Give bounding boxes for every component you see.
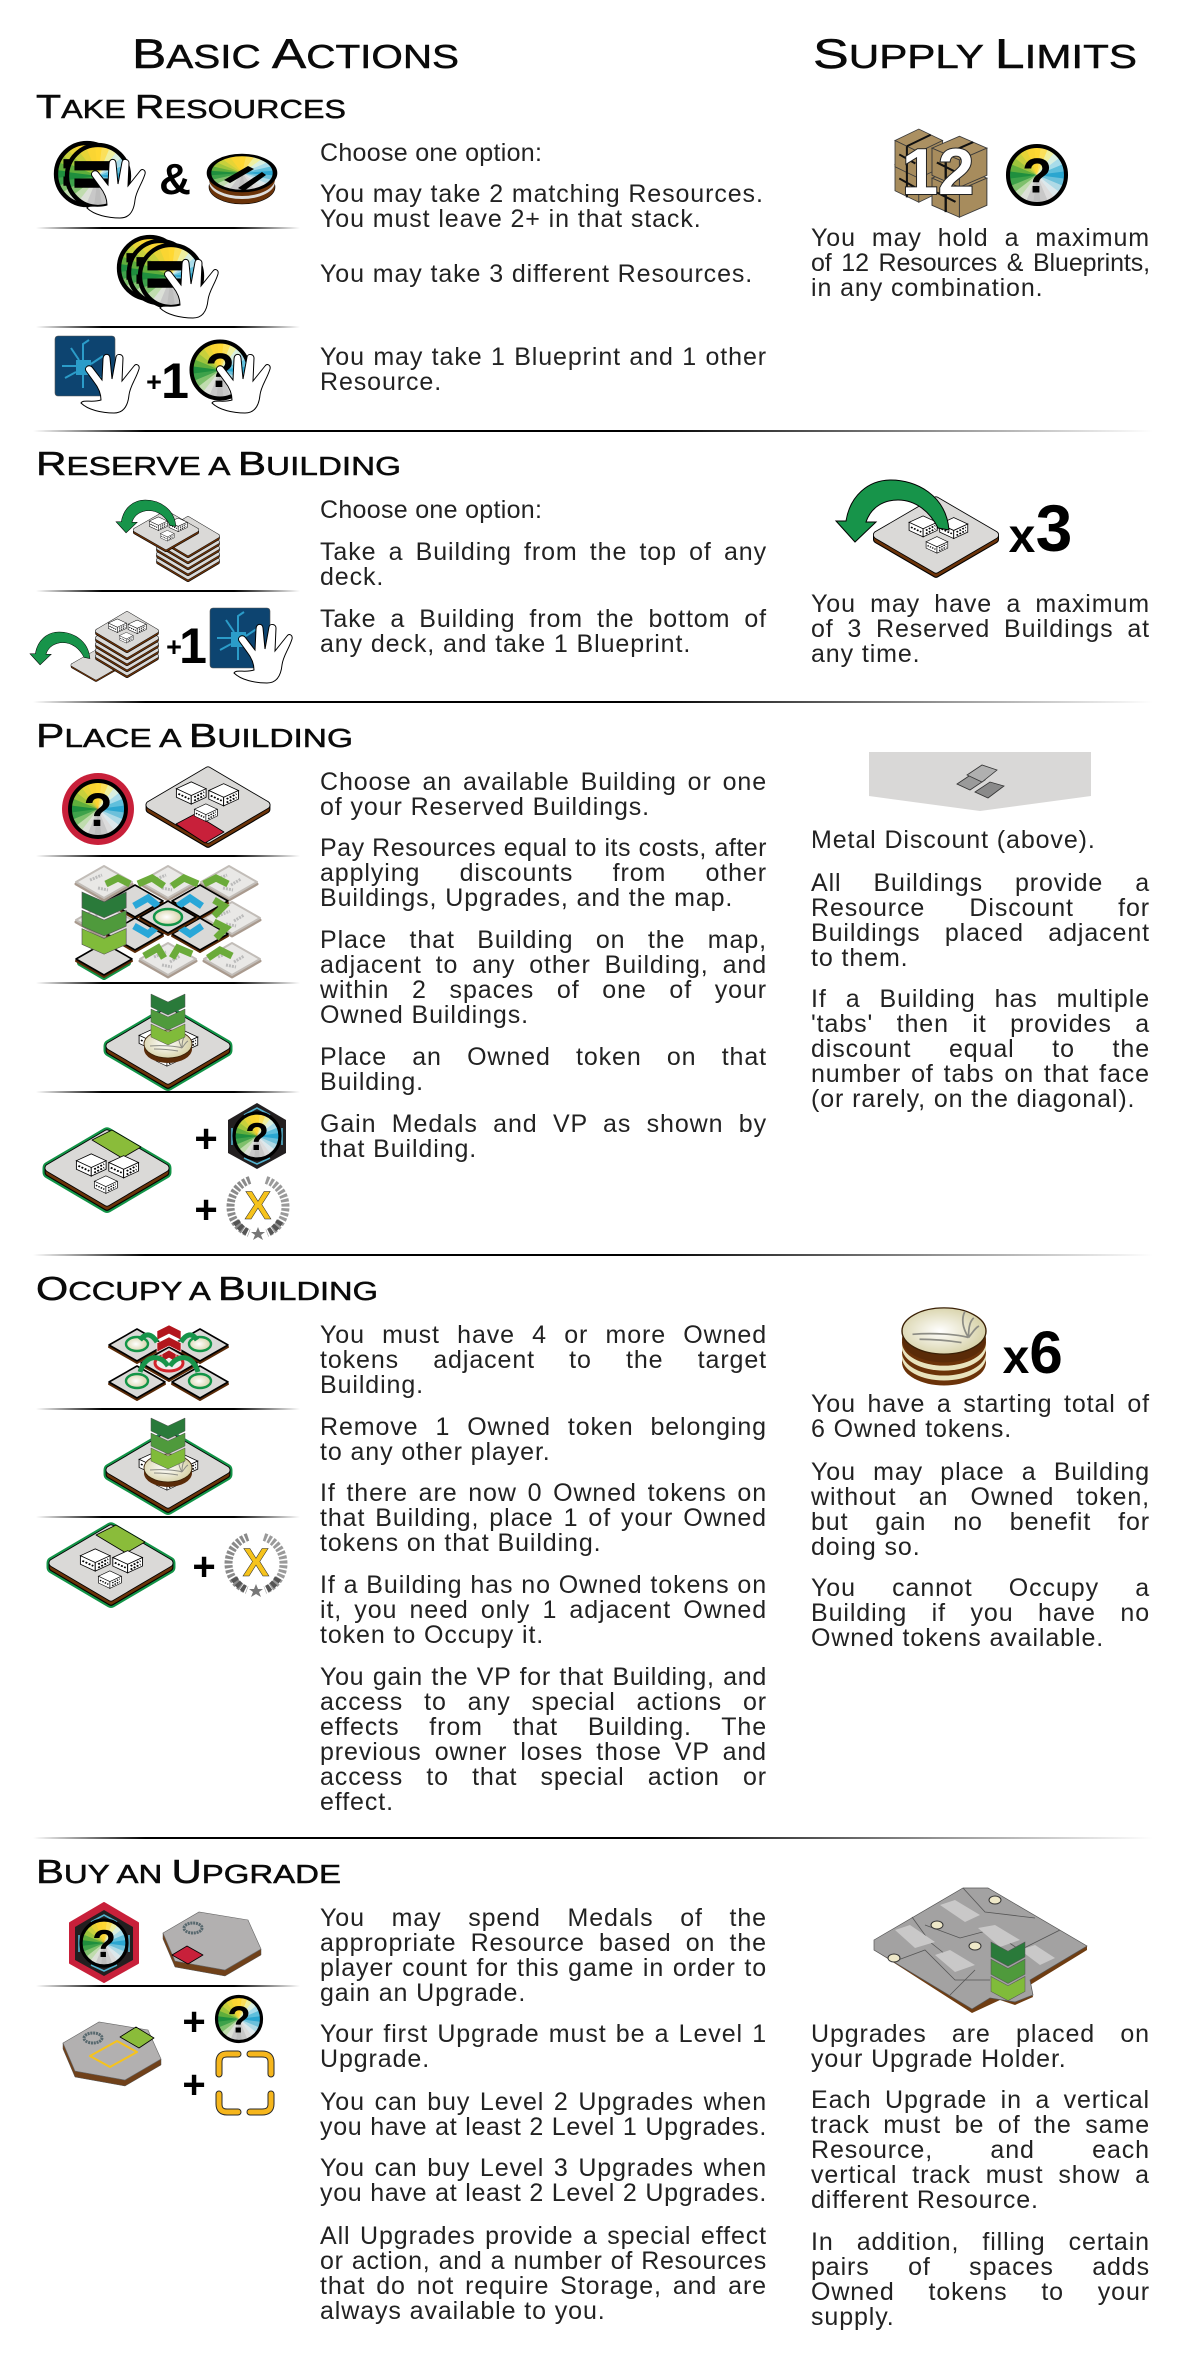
icon: any resource taken by hand [192,342,270,413]
text: place without token: but gain no benefit for [811,1508,1150,1536]
text: upgrade effects: that do not require Storage, and are [320,2272,767,2300]
icon: building with red cost tab [150,771,266,844]
text: upgrade effects [320,2222,767,2325]
text: resource discount [811,869,1150,972]
plus: + [194,1117,218,1161]
text: place owned token: Place an Owned token on that [320,1043,767,1071]
text: first upgrade: Your first Upgrade must be a Level 1 [320,2020,767,2048]
text: metal discount: Metal Discount (above). [811,826,1096,854]
text: vertical tracks: track must be of the same [811,2111,1150,2139]
text: gain medals: Gain Medals and VP as shown by [320,1110,767,1138]
text: zero tokens: If there are now 0 Owned tokens on [320,1479,767,1507]
panel: buy an upgrade [36,1853,1150,2331]
text: level 2: you have at least 2 Level 1 Upgrades. [320,2113,767,2141]
icon: upgrade holder [874,1888,1087,2013]
icon: crates with 12: 12 [902,135,974,208]
text: vertical tracks: different Resource. [811,2186,1039,2214]
plus: + [182,2063,206,2107]
icon: red medal [70,1903,138,1982]
text: take 2 matching [320,180,764,233]
times three: x [1009,510,1036,563]
heading: reserve a building: R ESERVE A BUILDING [36,445,401,482]
icon: owned token stack [902,1308,986,1385]
text: choose building: Choose an available Building or one [320,768,767,796]
text: reserve limit: of 3 Reserved Buildings at [811,615,1150,643]
text: resource supply limit: You may hold a maximum [811,224,1150,252]
text: place without token: You may place a Building [811,1458,1150,1486]
plus one [166,618,207,674]
text: four owned tokens: tokens adjacent to the target [320,1346,767,1374]
text: starting tokens [811,1390,1150,1443]
text: place on map: Owned Buildings. [320,1001,529,1029]
text: pay resources: applying discounts from other [320,859,767,887]
text: multiple tabs: number of tabs on that face [811,1060,1150,1088]
icon: owned token on building [110,994,226,1085]
text: level 2 [320,2088,767,2141]
text: resource discount: All Buildings provide a [811,869,1150,897]
icon: medal [228,1103,286,1169]
text: from top of deck [320,538,767,591]
text: level 3: you have at least 2 Level 2 Upgrades. [320,2179,767,2207]
text: cannot occupy: Building if you have no [811,1599,1150,1627]
shared icon definitions [0,0,25,25]
plus one: 1 [161,353,189,409]
plus one: + [146,367,162,397]
icon: reserve from bottom of deck [30,613,157,680]
plus: + [194,1188,218,1232]
text: choose one option: Choose one option: [320,139,542,167]
times six: x [1003,1331,1030,1384]
text: remove token: to any other player. [320,1438,551,1466]
text: spend medals [320,1904,767,2007]
text: spend medals: appropriate Resource based on the [320,1929,767,1957]
text: from top of deck: deck. [320,563,384,591]
icon: blueprint taken by hand [210,608,292,683]
heading: occupy a building: O CCUPY A BUILDING [36,1270,378,1307]
text: reserve limit: You may have a maximum [811,590,1150,618]
panel: place a building [36,717,1150,1256]
text: upgrade holder: your Upgrade Holder. [811,2045,1067,2073]
text: from bottom of deck: any deck, and take 1 Blueprint. [320,630,691,658]
text: from bottom of deck [320,605,767,658]
times six [1003,1319,1063,1386]
text: spend medals: player count for this game in order to [320,1954,767,1982]
text: vertical tracks: vertical track must show a [811,2161,1150,2189]
text: multiple tabs: If a Building has multiple [811,985,1150,1013]
text: vertical tracks [811,2086,1150,2214]
times three [1009,491,1072,565]
text: resource discount: to them. [811,944,909,972]
plus one: 1 [179,618,207,674]
text: remove token: Remove 1 Owned token belonging [320,1413,767,1441]
icon: red-ringed resource [62,773,134,845]
plus one [146,353,189,409]
text: gain medals: that Building. [320,1135,477,1163]
text: pairs of spaces: pairs of spaces adds [811,2253,1150,2281]
text: place on map: adjacent to any other Building, and [320,951,767,979]
icon: metal discount banner [869,752,1091,811]
text: gain VP: You gain the VP for that Building, and [320,1663,767,1691]
text: upgrade effects: or action, and a number of Resources [320,2247,767,2275]
icon: owned token on building [110,1418,226,1509]
text: gain VP [320,1663,767,1816]
text: level 2: You can buy Level 2 Upgrades when [320,2088,767,2116]
text: spend medals: gain an Upgrade. [320,1979,526,2007]
text: pairs of spaces: Owned tokens to your [811,2278,1150,2306]
icon: three different resources taken by hand [119,237,218,318]
text: place on map [320,926,767,1029]
text: no tokens: it, you need only 1 adjacent Owned [320,1596,767,1624]
panel: take resources [36,88,1150,432]
heading: take resources: TAKE RESOURCES [36,88,346,125]
text: cannot occupy: You cannot Occupy a [811,1574,1150,1602]
text: four owned tokens: Building. [320,1371,424,1399]
text: multiple tabs: (or rarely, on the diagonal). [811,1085,1135,1113]
text: multiple tabs: discount equal to the [811,1035,1150,1063]
text: take blueprint: Resource. [320,368,442,396]
icon: upgrade with green tab [63,2022,161,2086]
text: place on map: Place that Building on the map, [320,926,767,954]
times three: 3 [1036,491,1072,565]
text: place owned token [320,1043,767,1096]
icon: crates with 12 [895,129,987,217]
text: from bottom of deck: Take a Building from the bottom of [320,605,767,633]
text: starting tokens: 6 Owned tokens. [811,1415,1012,1443]
text: resource supply limit: of 12 Resources & Blueprints, [811,249,1150,277]
icon: gained building [53,1525,169,1602]
icon: blueprint taken by hand [55,336,139,413]
text: vertical tracks: Each Upgrade in a vertical [811,2086,1150,2114]
text: place without token [811,1458,1150,1561]
text: place without token: without an Owned token, [811,1483,1150,1511]
text: no tokens: token to Occupy it. [320,1621,544,1649]
heading: buy an upgrade: BUY AN UPGRADE [36,1853,341,1890]
icon: four owned tokens around target [109,1325,228,1400]
text: choose building: of your Reserved Buildings. [320,793,650,821]
text: zero tokens: that Building, place 1 of your Owned [320,1504,767,1532]
text: upgrade holder: Upgrades are placed on [811,2020,1150,2048]
plus: + [182,2000,206,2044]
text: cannot occupy: Owned tokens available. [811,1624,1104,1652]
text: no tokens [320,1571,767,1649]
text: first upgrade: Upgrade. [320,2045,430,2073]
text: resource discount: Resource Discount for [811,894,1150,922]
icon: gained building [49,1130,165,1207]
text: take blueprint [320,343,767,396]
text: multiple tabs [811,985,1150,1113]
text: zero tokens: tokens on that Building. [320,1529,602,1557]
icon: reserve from top of deck [116,500,218,580]
icon: reserved building x3 [836,480,995,574]
text: choose one option: Choose one option: [320,496,542,524]
text: place owned token: Building. [320,1068,424,1096]
icon: any resource [1008,146,1066,204]
heading: place a building: PLACE A BUILDING [36,717,353,754]
text: place without token: doing so. [811,1533,921,1561]
text: gain VP: access to that special action or [320,1763,767,1791]
text: resource supply limit [811,224,1150,302]
text: reserve limit: any time. [811,640,921,668]
text: resource supply limit: in any combination. [811,274,1044,302]
text: starting tokens: You have a starting total of [811,1390,1150,1418]
text: pay resources: Buildings, Upgrades, and the map. [320,884,733,912]
icon: yellow upgrade brackets [219,2054,271,2112]
icon: two matching resources taken by hand [56,143,145,218]
text: gain VP: access to any special actions or [320,1688,767,1716]
panel: occupy a building [36,1270,1150,1839]
plus: + [192,1545,216,1589]
text: pairs of spaces: In addition, filling certain [811,2228,1150,2256]
text: resource discount: Buildings placed adjacent [811,919,1150,947]
text: gain VP: effect. [320,1788,394,1816]
text: pay resources: Pay Resources equal to its costs, after [320,834,767,862]
text: gain VP: effects from that Building. The [320,1713,767,1741]
text: remove token [320,1413,767,1466]
text: four owned tokens [320,1321,767,1399]
icon: victory points laurel [231,1180,285,1240]
text: take 3 different: You may take 3 different Resources. [320,260,753,288]
text: zero tokens [320,1479,767,1557]
text: level 3 [320,2154,767,2207]
text: pairs of spaces: supply. [811,2303,895,2331]
text: upgrade effects: always available to you. [320,2297,606,2325]
text: multiple tabs: 'tabs' then it provides a [811,1010,1150,1038]
text: take 2 matching: You may take 2 matching Resources. [320,180,764,208]
text: upgrade effects: All Upgrades provide a special effect [320,2222,767,2250]
text: pay resources [320,834,767,912]
text: four owned tokens: You must have 4 or more Owned [320,1321,767,1349]
text: take blueprint: You may take 1 Blueprint and 1 other [320,343,767,371]
text: cannot occupy [811,1574,1150,1652]
divider 1 [36,227,300,229]
icon: any resource [216,1996,262,2042]
text: spend medals: You may spend Medals of the [320,1904,767,1932]
text: no tokens: If a Building has no Owned tokens on [320,1571,767,1599]
text: choose building [320,768,767,821]
times six: 6 [1029,1319,1063,1386]
text: first upgrade [320,2020,767,2073]
text: gain medals [320,1110,767,1163]
text: reserve limit [811,590,1150,668]
text: place on map: within 2 spaces of one of your [320,976,767,1004]
text: from top of deck: Take a Building from the top of any [320,538,767,566]
text: gain VP: previous owner loses those VP and [320,1738,767,1766]
text: pairs of spaces [811,2230,1150,2330]
text: upgrade holder [811,2020,1150,2073]
text: level 3: You can buy Level 3 Upgrades when [320,2154,767,2182]
icon: upgrade with red cost [163,1912,261,1976]
icon: map with adjacent placement [76,866,260,977]
text: take 2 matching: You must leave 2+ in that stack. [320,205,702,233]
panel: reserve a building [30,445,1150,703]
ampersand: & [159,155,191,204]
icon: victory points laurel [229,1537,283,1597]
plus one: + [166,632,182,662]
icon: resource stack [209,155,275,204]
text: vertical tracks: Resource, and each [811,2136,1150,2164]
